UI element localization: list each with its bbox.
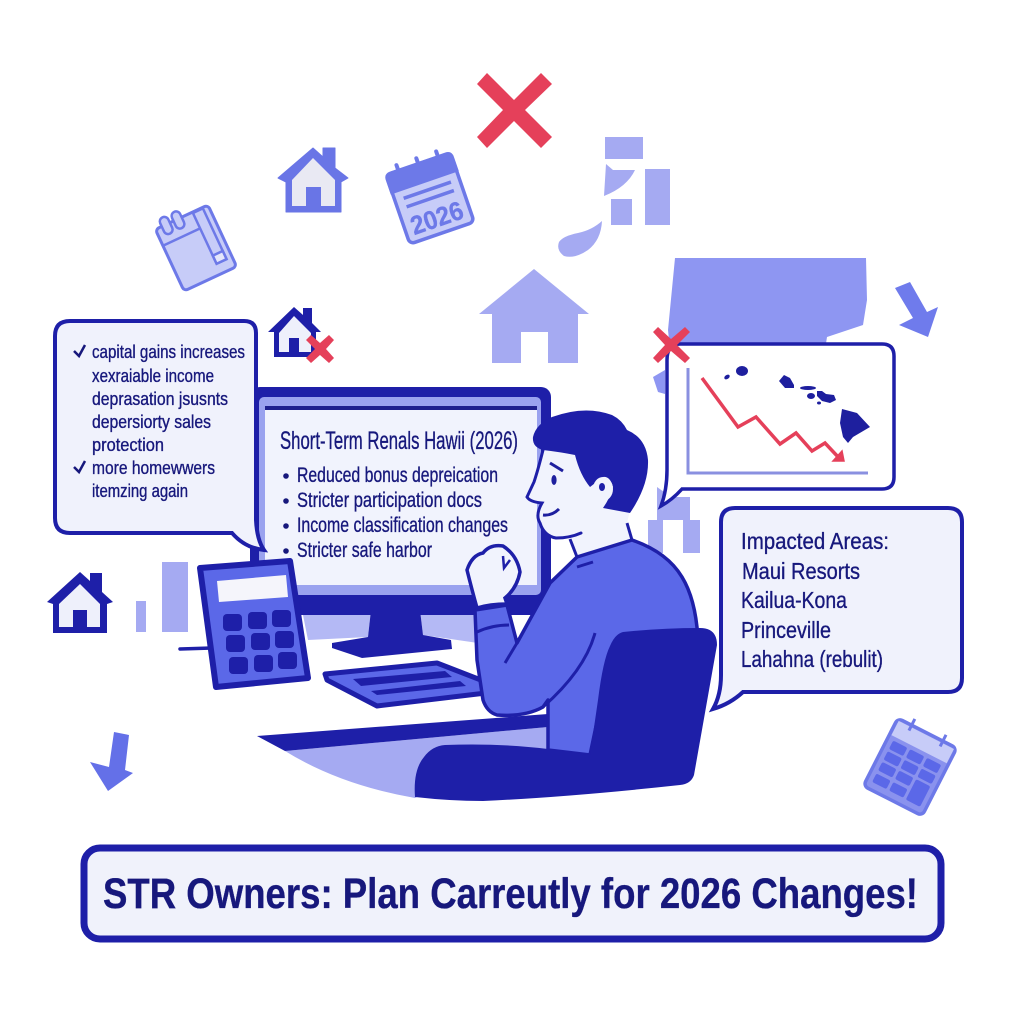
screen text: Stricter safe harbor bbox=[297, 539, 432, 562]
eye and brow bbox=[550, 463, 563, 485]
icon: arrow bottom left bbox=[90, 732, 133, 791]
impacted areas text bbox=[741, 528, 889, 672]
impacted areas text: Maui Resorts bbox=[742, 558, 860, 584]
person bbox=[415, 410, 717, 801]
leg and chair bbox=[415, 628, 717, 801]
monitor stand bbox=[302, 610, 478, 658]
checklist text: protection bbox=[92, 435, 164, 455]
cable line bbox=[180, 648, 212, 649]
icon: arrow top right bbox=[895, 282, 938, 337]
icon: grid calendar bottom right bbox=[863, 712, 960, 816]
check marks bbox=[74, 345, 85, 472]
decorative fragments top bbox=[558, 137, 670, 257]
smile bbox=[543, 509, 559, 515]
keyboard bbox=[325, 663, 486, 706]
icon: 2026 calendar: 2026 bbox=[406, 195, 467, 241]
icon: notepad bbox=[152, 198, 237, 291]
ear bbox=[593, 477, 613, 501]
checklist text: more homewwers bbox=[92, 458, 215, 478]
impacted areas text: Lahahna (rebulit) bbox=[741, 646, 883, 672]
checklist text: itemzing again bbox=[92, 481, 188, 501]
icon: large red cross bbox=[477, 73, 552, 148]
impacted areas text: Kailua-Kona bbox=[741, 587, 847, 613]
icon: large pale house bbox=[479, 269, 589, 363]
checklist text: capital gains increases bbox=[92, 342, 245, 362]
impacted areas text: Princeville bbox=[741, 617, 831, 643]
hair bbox=[533, 410, 648, 513]
chart axes bbox=[688, 368, 868, 473]
Hawaii islands map bbox=[723, 366, 870, 443]
panel: impacted areas bubble bbox=[713, 508, 962, 709]
screen text: Reduced bonus depreication bbox=[297, 464, 498, 487]
checklist text: depersiorty sales bbox=[92, 412, 211, 432]
screen text: Short-Term Renals Hawii (2026) bbox=[280, 427, 518, 455]
checklist text: deprasation jsusnts bbox=[92, 389, 228, 409]
face outline bbox=[527, 450, 581, 538]
screen text bbox=[280, 427, 518, 562]
icon: small navy house with cross bbox=[268, 307, 334, 363]
impacted areas text: Impacted Areas: bbox=[741, 528, 889, 554]
desk bbox=[257, 714, 548, 798]
pale sliver bbox=[653, 370, 665, 394]
face bbox=[527, 440, 640, 538]
screen text: Income classification changes bbox=[297, 514, 508, 537]
fist bbox=[467, 546, 520, 608]
neck bbox=[570, 520, 632, 557]
panel: left checklist bubble bbox=[55, 321, 264, 550]
icon: left navy house bbox=[47, 572, 113, 633]
calculator keys bbox=[223, 610, 297, 674]
icon: pale house behind bubble bbox=[648, 487, 700, 553]
calculator bbox=[200, 561, 308, 687]
checklist text: xexraiable income bbox=[92, 366, 214, 386]
monitor bbox=[250, 387, 551, 658]
torso and arm bbox=[475, 540, 698, 755]
icon: red cross on chart bbox=[653, 327, 690, 363]
pale bars bbox=[136, 562, 188, 632]
panel: chart bubble bbox=[661, 344, 894, 506]
large periwinkle shape bbox=[668, 258, 867, 350]
icon: 2026 calendar bbox=[382, 145, 476, 245]
declining line with arrow bbox=[702, 378, 844, 461]
title banner bbox=[84, 848, 941, 939]
icon: house medium bbox=[278, 148, 348, 212]
checklist text bbox=[92, 342, 245, 501]
screen text: Stricter participation docs bbox=[297, 489, 482, 512]
arm fold lines bbox=[477, 562, 595, 707]
